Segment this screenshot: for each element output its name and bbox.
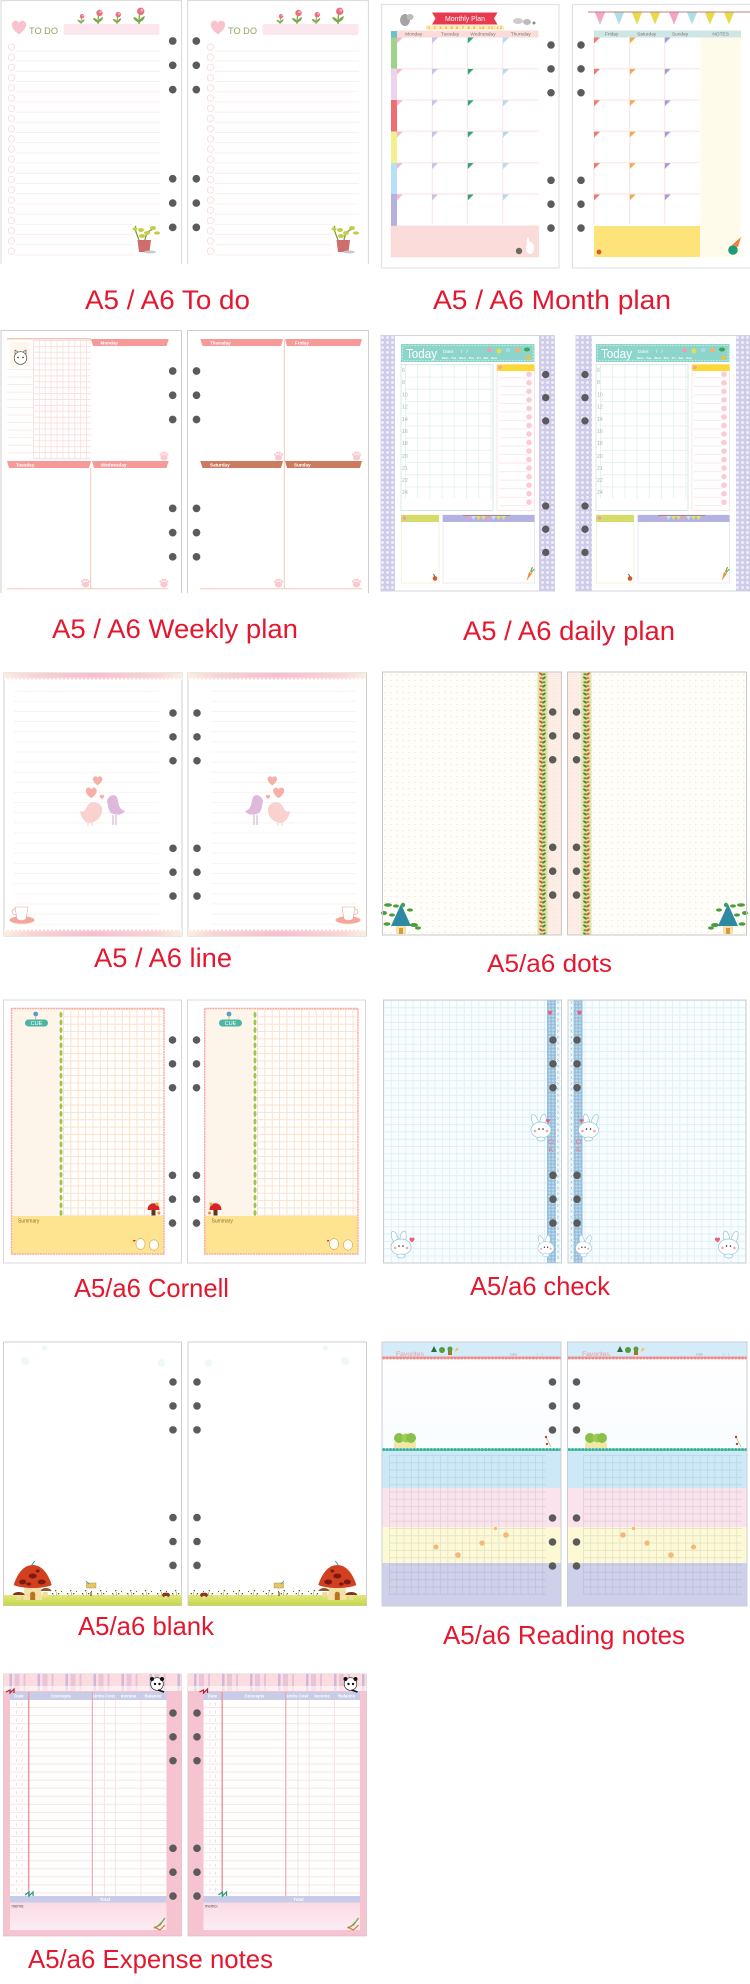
left lined art with birds and cup: [4, 673, 182, 936]
right dotted page art: [568, 672, 748, 935]
left table headers: Total: [100, 1897, 110, 1902]
left header text: / /: [537, 1352, 543, 1356]
left table headers: Income: [121, 1694, 137, 1698]
caption: A5/a6 Reading notes: [443, 1620, 685, 1650]
punched holes right: [193, 1036, 200, 1227]
day names: Friday: [295, 340, 309, 346]
left dotted page art: [381, 672, 562, 935]
falling leaves left: [434, 1527, 509, 1558]
right today header text: / /: [656, 349, 663, 355]
right header text: / /: [723, 1352, 729, 1356]
weekday labels right: Saturday: [637, 32, 657, 38]
day names: Saturday: [210, 462, 230, 468]
right hour labels: 8: [597, 380, 600, 386]
left memo label: memo:: [12, 1904, 24, 1908]
caption: A5 / A6 line: [94, 943, 232, 973]
page borders: [382, 672, 746, 935]
right memo label: memo:: [205, 1904, 218, 1908]
left hour labels: 12: [402, 404, 408, 410]
right hour labels: 16: [597, 429, 603, 435]
punched holes right: [193, 367, 200, 561]
left today header text: / /: [461, 349, 468, 355]
caption: A5 / A6 Month plan: [433, 285, 671, 315]
right Summary label: Summary: [212, 1218, 233, 1224]
weekday labels right: Friday: [605, 32, 619, 38]
right blank page: [188, 1342, 366, 1606]
left header text: Favorites: [396, 1351, 425, 1358]
caption: A5/a6 blank: [78, 1611, 215, 1641]
punched holes left: [169, 1709, 177, 1900]
right hour labels: 24: [597, 490, 603, 496]
left lined page: [4, 673, 182, 936]
right header text: Favorites: [582, 1351, 611, 1358]
caption: A5 / A6 daily plan: [463, 616, 675, 646]
left check page art: [384, 1000, 562, 1263]
left hour labels: 24: [402, 490, 408, 496]
left today header text: Mon · Tue · Wed · Thu · Fri · Sat · Sun: [442, 356, 497, 360]
right hour labels: 18: [597, 441, 603, 447]
left TO DO heading: TO DO: [29, 26, 58, 37]
right lined art with birds and cup: [188, 673, 366, 936]
right month page: [572, 4, 750, 268]
left table headers: Date: [14, 1694, 24, 1698]
punched holes right: [193, 1378, 201, 1569]
icon: flower sprig right: [735, 1436, 741, 1447]
left today header text: [406, 347, 497, 361]
day names: Sunday: [294, 462, 311, 468]
punched holes right: [573, 1036, 581, 1227]
right to-do page: [188, 0, 368, 264]
day names: Tuesday: [16, 462, 35, 468]
punched holes left: [169, 367, 177, 561]
right lined page: [188, 673, 366, 936]
OK letters left: K: [548, 1145, 554, 1154]
icon: panda left: [150, 1677, 164, 1692]
caption: A5 / A6 To do: [85, 285, 250, 315]
OK letters right: O: [576, 1137, 582, 1146]
panel: A5 / A6 line: [4, 673, 366, 973]
punched holes left: [549, 1036, 557, 1227]
punched holes right: [193, 709, 201, 900]
right header text: Date: [696, 1352, 703, 1356]
left table headers: Balance: [145, 1694, 162, 1698]
weekday labels right: NOTES: [712, 32, 729, 38]
caption: A5/a6 Expense notes: [28, 1944, 273, 1974]
right CUE tag: CUE: [225, 1021, 237, 1027]
left hour labels: 16: [402, 429, 408, 435]
punched holes left: [169, 1378, 177, 1569]
panel: A5/a6 Reading notes: [382, 1342, 747, 1650]
icon: bush planters right: [585, 1433, 607, 1448]
right today header text: Mon · Tue · Wed · Thu · Fri · Sat · Sun: [637, 356, 692, 360]
right header text: [582, 1351, 729, 1358]
icons: right header trees: [617, 1346, 645, 1355]
right check page art: [568, 1000, 746, 1263]
left CUE tag: CUE: [31, 1021, 43, 1027]
right table headers: Total: [293, 1897, 304, 1902]
panel: A5/a6 Expense notes: [4, 1674, 366, 1974]
panel: A5/a6 blank: [4, 1342, 366, 1641]
icon: cartoon animals: [400, 14, 536, 26]
left hour labels: 14: [402, 417, 408, 423]
day names: Monday: [100, 340, 118, 346]
left CUE tag: [25, 1012, 48, 1027]
right weekly page: [188, 330, 368, 593]
left hour labels: 20: [402, 454, 408, 460]
weekday labels right: Sunday: [672, 32, 689, 38]
punched holes right: [581, 371, 589, 556]
day names: Wednesday: [101, 462, 127, 468]
date number strip: 1 2 3 4 5 6 7 8 9 10 11 12: [428, 26, 502, 30]
left today header text: Today: [406, 347, 438, 361]
left blank page: [4, 1342, 182, 1606]
icon: bush planters left: [394, 1433, 416, 1448]
panel: A5 / A6 To do: [1, 0, 368, 315]
punched holes right: [192, 37, 200, 231]
icon: panda right: [344, 1677, 358, 1692]
bunting: [588, 12, 750, 24]
left table headers: [14, 1694, 162, 1902]
left Cornell page: [4, 1000, 182, 1263]
weekday labels left: Monday: [405, 32, 423, 38]
right hour labels: 12: [597, 404, 603, 410]
icon: mushroom left: [148, 1202, 160, 1216]
panel: A5/a6 check: [384, 1000, 746, 1301]
right hour labels: 6: [597, 368, 600, 374]
right daily page: [576, 336, 750, 591]
left hour labels: 21: [402, 466, 408, 472]
panel: A5/a6 dots: [381, 672, 748, 978]
Monthly Plan ribbon: [432, 12, 498, 24]
punched holes right: [573, 708, 580, 899]
punched holes left: [547, 41, 555, 232]
left Summary label: Summary: [18, 1218, 40, 1224]
weekday labels right: [605, 32, 729, 38]
icons: paw prints: [81, 452, 361, 588]
left daily page: [381, 336, 554, 591]
panel: A5/a6 Cornell: [4, 1000, 366, 1303]
right table headers: Cost: [299, 1694, 309, 1698]
left hour labels: 18: [402, 441, 408, 447]
right mushroom meadow: [188, 1345, 366, 1606]
punched holes left: [549, 708, 556, 899]
left hour labels: 8: [402, 380, 405, 386]
right hour labels: 21: [597, 466, 603, 472]
left hour labels: 6: [402, 368, 405, 374]
weekday labels left: Tuesday: [441, 32, 460, 38]
Monthly Plan ribbon: Monthly Plan: [445, 16, 485, 23]
left table headers: Concepts: [51, 1694, 72, 1698]
left daily schedule art: [401, 344, 534, 583]
right table headers: Concepts: [244, 1694, 265, 1698]
punched holes right: [193, 1709, 201, 1900]
caption: A5/a6 dots: [487, 950, 612, 978]
left hour labels: [402, 368, 408, 496]
panel: A5 / A6 daily plan: [381, 336, 750, 646]
left expense page: [4, 1674, 182, 1936]
weekday labels left: Wednesday: [470, 32, 496, 38]
OK letters right: [576, 1137, 582, 1154]
left table headers: Cost: [105, 1694, 115, 1698]
left to-do page art: [8, 8, 162, 260]
caption: A5 / A6 Weekly plan: [52, 614, 298, 644]
right today header text: Date:: [638, 349, 649, 355]
punched holes left: [169, 1036, 176, 1227]
right month grid: [594, 30, 741, 257]
left header text: [396, 1351, 543, 1358]
day names: [16, 340, 311, 468]
right hour labels: 14: [597, 417, 603, 423]
right TO DO heading: TO DO: [228, 26, 257, 37]
right Cornell page: [188, 1000, 366, 1263]
punched holes right: [573, 1378, 580, 1570]
lace strips: [381, 336, 750, 590]
caption: A5/a6 check: [470, 1271, 611, 1301]
punched holes left: [542, 371, 549, 556]
falling leaves right: [620, 1527, 696, 1558]
left mushroom meadow: [4, 1345, 182, 1606]
right hour labels: [597, 368, 603, 496]
left reading page: [382, 1342, 561, 1606]
right to-do page art: [207, 8, 361, 260]
habit grid with lines: [7, 338, 91, 459]
icon: small apple: [597, 250, 601, 254]
right today header text: Today: [601, 347, 633, 361]
right hour labels: 22: [597, 478, 603, 484]
left month grid: [391, 30, 538, 257]
left table headers: Units: [93, 1694, 105, 1698]
day banners: [7, 339, 362, 468]
right hour labels: 10: [597, 392, 603, 398]
right hour labels: 20: [597, 454, 603, 460]
panel: A5 / A6 Month plan: [382, 4, 750, 315]
right daily schedule art: [596, 344, 730, 583]
icon: flower sprig left: [545, 1436, 551, 1447]
punched holes right: [577, 41, 585, 232]
right table headers: [208, 1694, 355, 1902]
punched holes left: [169, 37, 177, 231]
left to-do page: [1, 0, 182, 264]
right table headers: Income: [314, 1694, 330, 1698]
left weekly page: [1, 330, 182, 593]
right table headers: Date: [208, 1694, 218, 1698]
icon: chicks left: [133, 1239, 159, 1250]
right expense page: [188, 1674, 366, 1936]
left hour labels: 22: [402, 478, 408, 484]
right reading page: [568, 1342, 747, 1606]
OK letters right: K: [576, 1145, 581, 1154]
icons: bows and sprigs left: [6, 1689, 165, 1930]
right today header text: [601, 347, 692, 361]
right CUE tag: [219, 1012, 242, 1027]
OK letters left: [548, 1137, 554, 1154]
icon: mushroom right: [208, 1202, 222, 1216]
page borders: [384, 1000, 746, 1263]
punched holes left: [169, 709, 177, 900]
weekday labels left: Thursday: [511, 32, 531, 38]
icon: rabbit in memo box: [516, 238, 534, 254]
day names: Thursday: [210, 340, 231, 346]
left hour labels: 10: [402, 392, 408, 398]
icon: chicks right: [327, 1239, 353, 1250]
left today header text: Date:: [443, 349, 454, 355]
weekday labels left: [405, 32, 531, 38]
icons: header trees: [431, 1346, 459, 1355]
punched holes left: [549, 1378, 556, 1570]
caption: A5/a6 Cornell: [74, 1273, 229, 1303]
icon: party frog: [728, 237, 741, 255]
divider lines: [7, 340, 362, 589]
left month page: [382, 4, 559, 268]
OK letters left: O: [548, 1137, 554, 1146]
left header text: Date: [510, 1352, 517, 1356]
right table headers: Units: [287, 1694, 298, 1698]
icons: bows and sprigs right: [200, 1689, 358, 1930]
panel: A5 / A6 Weekly plan: [1, 330, 368, 644]
right table headers: Balance: [338, 1694, 355, 1698]
